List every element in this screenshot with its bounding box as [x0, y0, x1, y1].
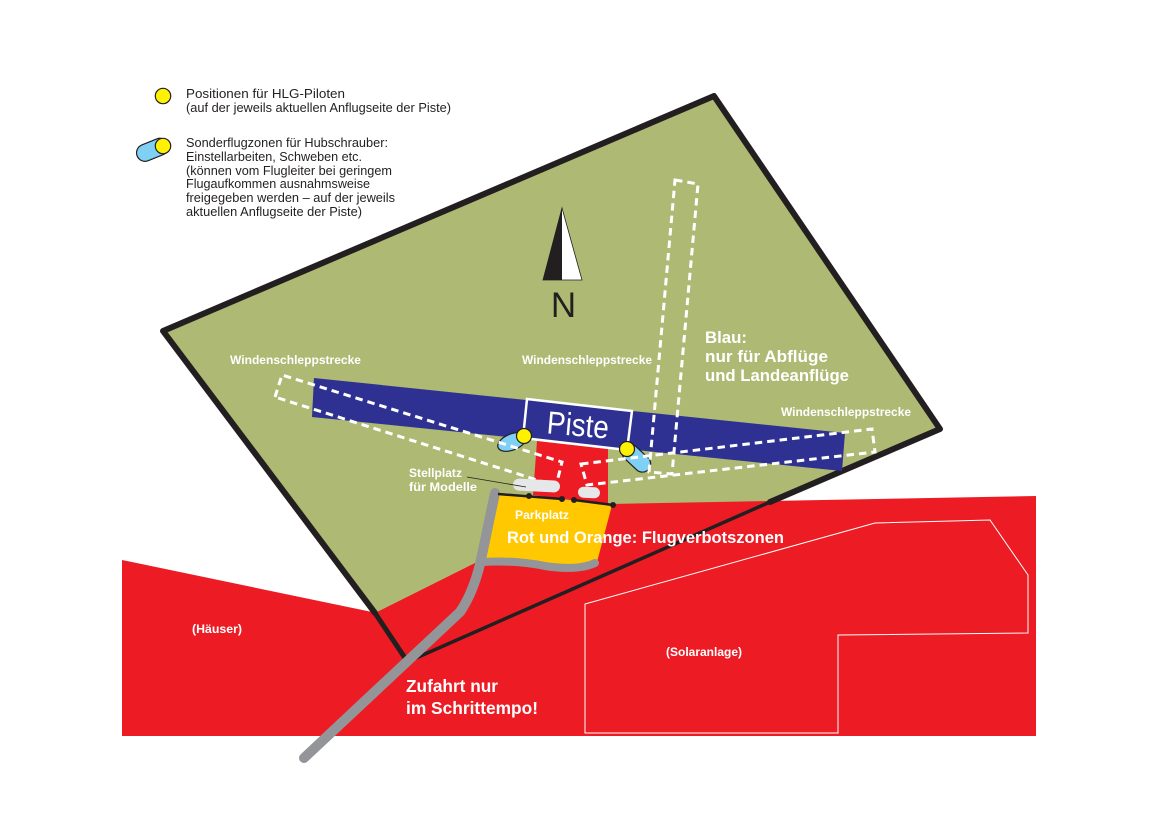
legend: helicopter zones: aktuellen Anflugseite der Piste)	[186, 205, 362, 219]
pilot position west	[516, 428, 532, 444]
label: access note	[406, 676, 538, 718]
winch towing strip north	[649, 180, 698, 474]
airfield boundary line	[163, 96, 940, 658]
label: solar installation: (Solaranlage)	[666, 645, 742, 659]
label: Windenschleppstrecke east: Windenschleppstrecke	[781, 405, 911, 419]
legend: pilot positions: Positionen für HLG-Piloten	[186, 87, 345, 101]
access road	[304, 493, 595, 758]
helicopter zone east	[619, 441, 654, 475]
winch towing strip east	[581, 429, 875, 485]
legend: pilot positions: (auf der jeweils aktuellen Anflugseite der Piste)	[186, 101, 451, 115]
legend: pilot positions	[155, 87, 451, 115]
label: houses: (Häuser)	[192, 622, 242, 636]
red zone below runway	[533, 441, 608, 505]
label: Windenschleppstrecke north: Windenschleppstrecke	[522, 353, 652, 367]
label: blue zone note	[705, 329, 849, 385]
north arrow: N	[551, 286, 576, 325]
legend: helicopter zones	[134, 136, 395, 219]
label: Stellplatz für Modelle: für Modelle	[409, 480, 477, 494]
runway Piste box	[523, 399, 632, 450]
parking boundary with posts	[498, 494, 616, 508]
legend: helicopter zones: Flugaufkommen ausnahmsweise	[186, 177, 370, 191]
north arrow	[543, 208, 582, 325]
legend: helicopter zones: Sonderflugzonen für Hubschrauber:	[186, 136, 388, 150]
legend: helicopter zones: (können vom Flugleiter bei geringem	[186, 164, 392, 178]
label: Stellplatz für Modelle	[409, 466, 477, 494]
model parking areas	[513, 478, 600, 499]
parking area	[483, 493, 612, 567]
legend: helicopter zones: Einstellarbeiten, Schweben etc.	[186, 150, 362, 164]
label: Parkplatz: Parkplatz	[515, 508, 569, 522]
label: Stellplatz für Modelle: Stellplatz	[409, 466, 462, 480]
label: blue zone note: Blau:	[705, 329, 747, 347]
label: access note: im Schrittempo!	[406, 698, 538, 718]
label: Windenschleppstrecke west: Windenschleppstrecke	[230, 353, 361, 367]
runway Piste box: Piste	[546, 404, 610, 446]
label: access note: Zufahrt nur	[406, 676, 498, 696]
label: blue zone note: nur für Abflüge	[705, 348, 828, 366]
helicopter zone west	[495, 429, 529, 455]
label: no-fly zones: Rot und Orange: Flugverbotszonen	[507, 528, 784, 547]
airfield green area	[163, 96, 940, 658]
red no-fly zone	[122, 496, 1036, 736]
leader line to model parking	[467, 477, 526, 487]
pilot position east	[620, 442, 634, 456]
legend: helicopter zones: freigegeben werden – auf der jeweils	[186, 191, 395, 205]
blue runway approach strip	[312, 378, 845, 471]
winch towing strip west	[275, 375, 562, 486]
label: blue zone note: und Landeanflüge	[705, 367, 849, 385]
solar installation outline	[585, 520, 1028, 733]
